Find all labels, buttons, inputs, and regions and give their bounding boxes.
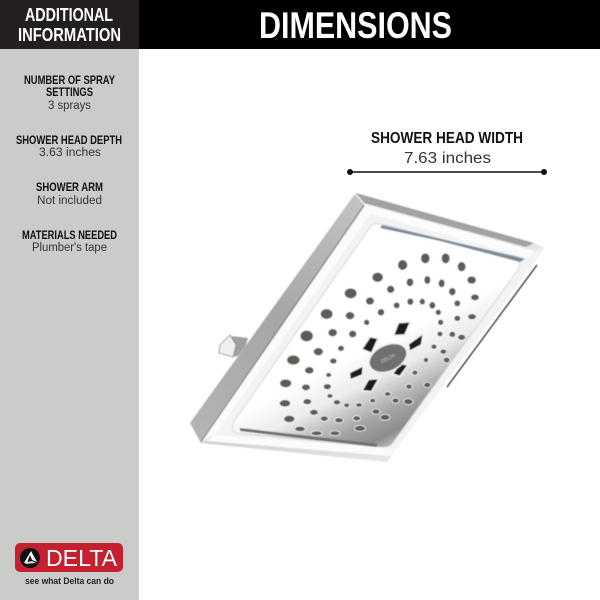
icon: shower head — [190, 193, 545, 462]
spray face — [232, 224, 519, 447]
header: additional information — [0, 0, 139, 49]
center diamonds — [349, 322, 423, 392]
text block: number of spray settings: 3 sprays — [48, 100, 91, 112]
text block: shower head depth: SHOWER HEAD DEPTH — [16, 135, 122, 147]
lower slot — [240, 428, 377, 447]
dimension label: shower head width: 7.63 inches — [404, 150, 491, 167]
text block: shower head depth — [16, 135, 122, 159]
logo: Delta: DELTA — [46, 545, 117, 571]
title — [139, 0, 600, 49]
center badge: DELTA — [380, 353, 397, 365]
arrow: width dimension line — [347, 169, 547, 175]
logo: Delta — [15, 543, 123, 586]
left side band — [190, 194, 365, 443]
text block: materials needed — [22, 230, 117, 254]
text block: number of spray settings — [24, 75, 115, 112]
icon: delta emblem — [20, 548, 40, 568]
header: additional information: ADDITIONAL — [25, 4, 113, 25]
text block: materials needed: MATERIALS NEEDED — [22, 230, 117, 242]
text block: shower arm — [36, 182, 103, 207]
text block: number of spray settings: SETTINGS — [46, 87, 93, 99]
text block: materials needed: Plumber's tape — [32, 242, 107, 254]
outer frame — [190, 193, 545, 462]
top side band — [355, 193, 545, 251]
right dark edge — [447, 265, 537, 387]
text block: shower head depth: 3.63 inches — [39, 147, 101, 159]
text block: shower arm: SHOWER ARM — [36, 182, 103, 194]
shower arm connector — [219, 335, 248, 357]
text block: shower arm: Not included — [37, 195, 102, 207]
dimension label: shower head width: SHOWER HEAD WIDTH — [371, 130, 523, 147]
upper slot — [380, 225, 525, 262]
title: DIMENSIONS — [259, 5, 452, 46]
dimension label: shower head width — [371, 130, 523, 167]
bottom lip — [201, 436, 396, 462]
text block: number of spray settings: NUMBER OF SPRAY — [24, 75, 115, 87]
center badge — [364, 338, 412, 378]
header: additional information: INFORMATION — [18, 24, 121, 45]
panel: sidebar background — [0, 0, 139, 600]
spray nozzles — [279, 253, 479, 436]
logo: Delta: see what Delta can do — [25, 576, 114, 586]
